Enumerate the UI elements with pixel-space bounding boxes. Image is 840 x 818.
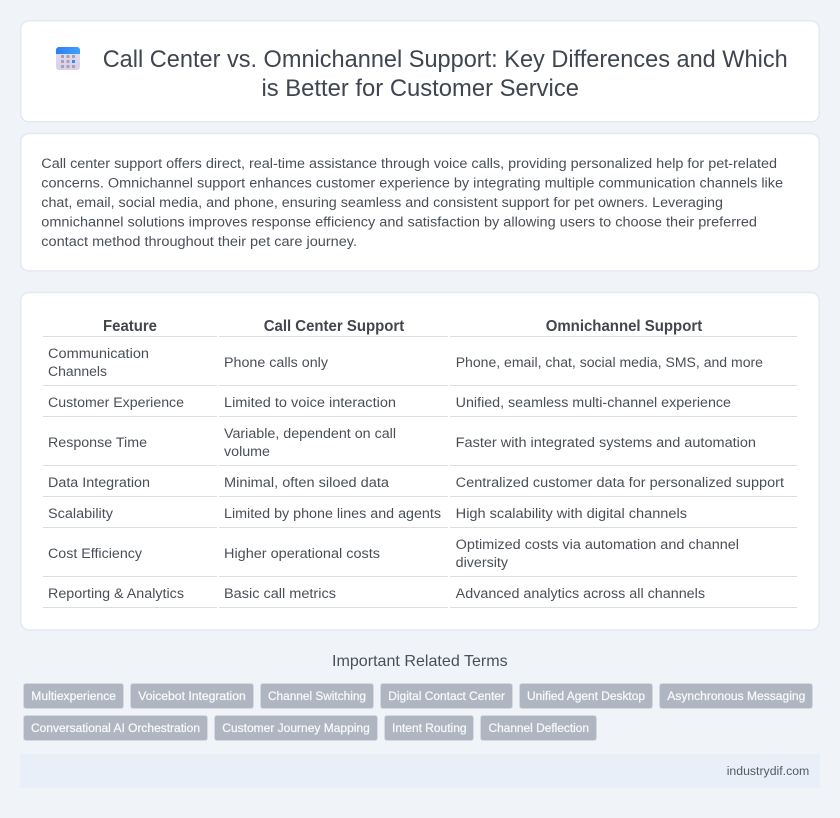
tag: Voicebot Integration — [130, 684, 254, 708]
table row: data integration: Data Integration — [48, 475, 150, 491]
tag: Channel Switching: Channel Switching — [268, 689, 366, 703]
icon: calendar — [56, 47, 80, 70]
tag: Multiexperience: Multiexperience — [31, 689, 116, 703]
table row: scalability: Scalability — [48, 506, 114, 522]
table row: response time: Variable, dependent on call — [224, 426, 396, 442]
tag: Asynchronous Messaging — [660, 684, 812, 708]
tag: Digital Contact Center — [380, 684, 512, 708]
tag: Asynchronous Messaging: Asynchronous Messaging — [667, 689, 805, 703]
table row: customer experience — [43, 395, 797, 416]
table row: communication channels: Channels — [48, 364, 107, 380]
footer bar — [20, 754, 820, 788]
tag: Conversational AI Orchestration — [24, 716, 208, 740]
intro paragraph: concerns. Omnichannel support enhances customer experience by integrating multiple communication channels like — [41, 176, 783, 192]
tag: Customer Journey Mapping: Customer Journey Mapping — [222, 721, 370, 735]
tag: Unified Agent Desktop: Unified Agent Desktop — [527, 689, 645, 703]
table row: cost efficiency: Cost Efficiency — [48, 546, 143, 562]
table row: reporting and analytics: Advanced analytics across all channels — [456, 586, 705, 602]
table row: scalability: Limited by phone lines and agents — [224, 506, 441, 522]
table header row — [43, 318, 797, 336]
table row: reporting and analytics: Basic call metrics — [224, 586, 336, 602]
table row: reporting and analytics — [43, 586, 797, 608]
table row: customer experience: Customer Experience — [48, 395, 184, 411]
tag: Multiexperience — [24, 684, 124, 708]
table header row: Call Center Support — [264, 318, 405, 335]
table row: response time: volume — [224, 444, 270, 460]
tag: Channel Switching — [260, 684, 374, 708]
intro paragraph: contact method throughout their pet care journey. — [41, 234, 357, 250]
section heading: related terms: Important Related Terms — [332, 653, 508, 670]
table row: communication channels: Phone, email, chat, social media, SMS, and more — [456, 355, 763, 371]
intro paragraph: chat, email, social media, and phone, ensuring seamless and consistent support for pet owners. Leveraging — [41, 195, 723, 211]
tag: Customer Journey Mapping — [214, 716, 378, 740]
table row: data integration — [43, 475, 797, 496]
table row: customer experience: Unified, seamless multi-channel experience — [456, 395, 731, 411]
table row: cost efficiency: diversity — [456, 555, 509, 571]
table row: communication channels — [43, 346, 797, 386]
table row: scalability: High scalability with digital channels — [456, 506, 687, 522]
title: Call Center vs. Omnichannel Support: Key Differences and Which — [103, 46, 788, 73]
table row: communication channels: Phone calls only — [224, 355, 329, 371]
table row: reporting and analytics: Reporting & Analytics — [48, 586, 184, 602]
table row: response time: Faster with integrated systems and automation — [456, 435, 756, 451]
panel: comparison table — [21, 292, 819, 630]
table row: scalability — [43, 506, 797, 528]
table row: data integration: Centralized customer data for personalized support — [456, 475, 784, 491]
tag: Conversational AI Orchestration: Conversational AI Orchestration — [31, 721, 200, 735]
intro paragraph: Call center support offers direct, real-time assistance through voice calls, providing personalized help for pet-related — [41, 156, 777, 172]
intro paragraph: omnichannel solutions improves response efficiency and satisfaction by allowing users to choose their preferred — [41, 214, 757, 230]
footer source: industrydif.com — [727, 764, 809, 778]
table header row: Omnichannel Support — [546, 318, 703, 335]
table row: response time — [43, 426, 797, 466]
intro paragraph — [41, 156, 783, 250]
table row: cost efficiency — [43, 537, 797, 576]
table header row: Feature — [103, 318, 157, 335]
title — [103, 46, 788, 102]
table row: communication channels: Communication — [48, 346, 149, 362]
panel: introduction — [21, 134, 819, 271]
table row: cost efficiency: Higher operational costs — [224, 546, 380, 562]
table row: customer experience: Limited to voice interaction — [224, 395, 396, 411]
title: is Better for Customer Service — [262, 75, 579, 102]
panel: title header — [21, 21, 819, 122]
tag: Intent Routing: Intent Routing — [392, 721, 466, 735]
table row: response time: Response Time — [48, 435, 147, 451]
tag: Intent Routing — [384, 716, 474, 740]
table row: data integration: Minimal, often siloed data — [224, 475, 389, 491]
tag: Digital Contact Center: Digital Contact Center — [388, 689, 505, 703]
tag: Channel Deflection: Channel Deflection — [488, 721, 589, 735]
tag: Unified Agent Desktop — [520, 684, 652, 708]
related term tags — [24, 684, 812, 740]
table row: cost efficiency: Optimized costs via automation and channel — [456, 537, 739, 553]
tag: Voicebot Integration: Voicebot Integration — [138, 689, 246, 703]
tag: Channel Deflection — [480, 716, 596, 740]
